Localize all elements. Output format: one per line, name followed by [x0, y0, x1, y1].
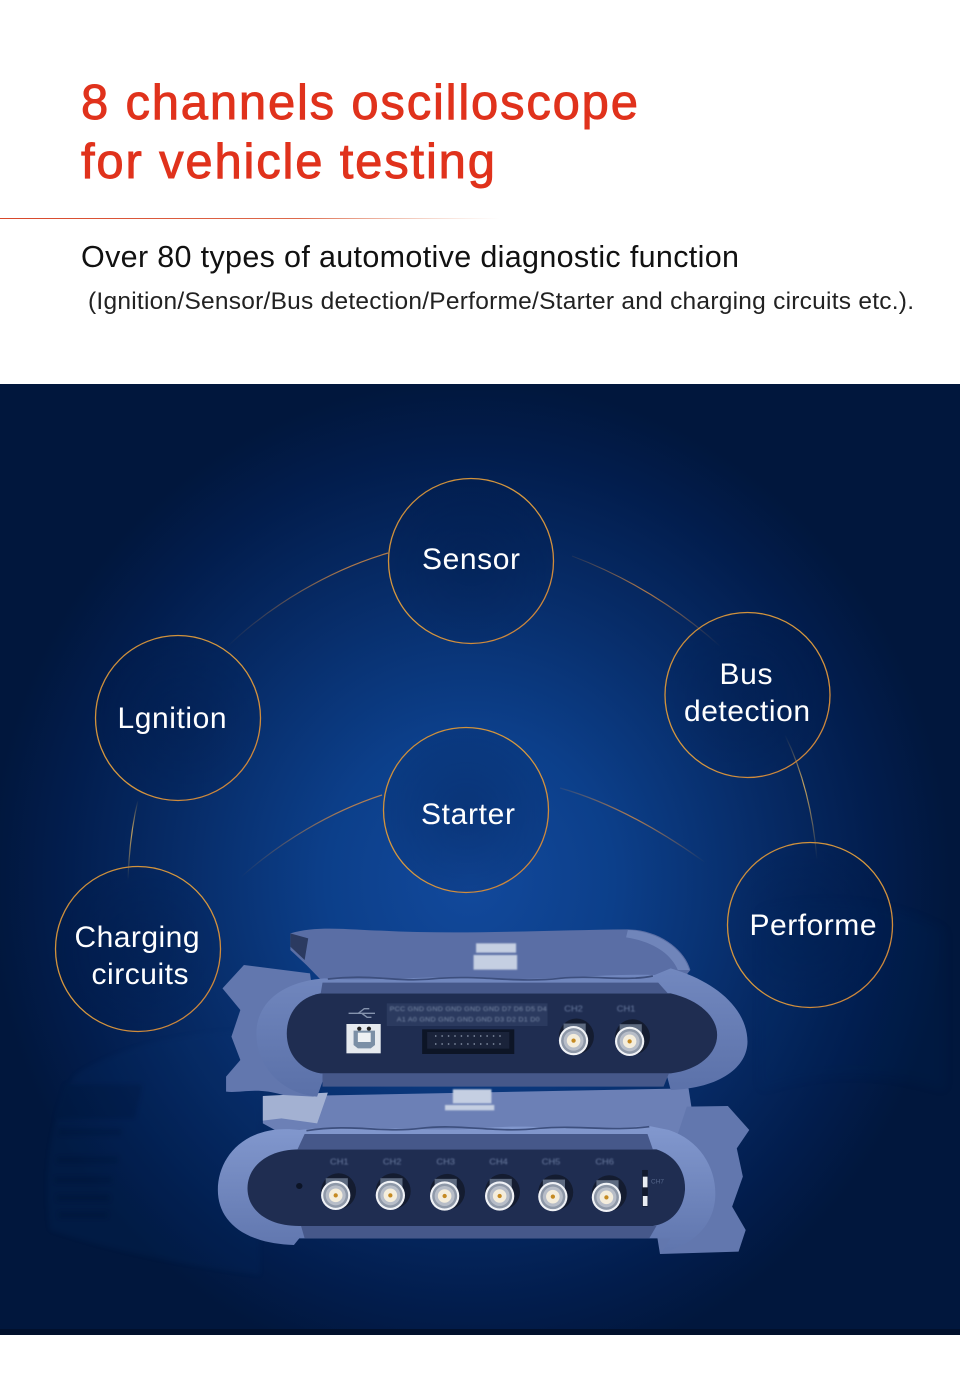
title: for vehicle testing: [81, 135, 495, 189]
upper bumper wave seam: [328, 976, 653, 980]
lower channel labels: CH3: [436, 1157, 455, 1166]
upper panel: [287, 993, 717, 1073]
node: Bus detection: detection: [684, 695, 810, 728]
lower channel labels: CH6: [595, 1157, 614, 1166]
node: Charging circuits: circuits: [92, 958, 188, 991]
arc: ignition to sensor: [226, 553, 388, 648]
probe compensation terminals: [642, 1170, 664, 1207]
lower channel labels: [330, 1157, 614, 1166]
probe compensation terminals: CH7: [651, 1179, 664, 1185]
lower channel labels: CH5: [542, 1157, 560, 1166]
upper BNC connectors: [559, 1019, 650, 1056]
power indicator: [296, 1183, 302, 1189]
arc: bus detection to performe: [785, 735, 817, 860]
lower channel labels: CH1: [330, 1157, 349, 1166]
arc: starter left: [240, 795, 382, 878]
upper case logo: [474, 943, 517, 970]
device: upper 2-channel oscilloscope: [222, 929, 747, 1097]
node: Starter: Starter: [421, 798, 515, 831]
node: Performe: Performe: [750, 909, 876, 942]
title: 8 channels oscilloscope: [81, 76, 638, 130]
upper case top: [290, 929, 690, 990]
bottom dark edge: [0, 1329, 960, 1335]
node: Charging circuits: Charging: [74, 921, 200, 954]
subtitle: Over 80 types of automotive diagnostic function: [81, 240, 739, 274]
lower case logo: [445, 1089, 494, 1110]
divider rule: [0, 218, 500, 219]
lower channel labels: CH2: [383, 1157, 401, 1166]
lower front bumper: [218, 1126, 715, 1253]
lower panel: [247, 1149, 685, 1226]
arc: starter right: [560, 788, 706, 863]
node: Sensor: Sensor: [422, 543, 520, 576]
node: Bus detection: Bus: [720, 658, 772, 691]
lower BNC connectors: [321, 1173, 627, 1212]
node: Starter: [384, 728, 548, 892]
node: Bus detection: [665, 612, 830, 778]
node: Lgnition: [96, 636, 260, 800]
digital pin label plate: [387, 1003, 547, 1026]
upper channel labels: CH1: [617, 1004, 635, 1014]
supporting text: (Ignition/Sensor/Bus detection/Performe/Starter and charging circuits etc.).: [88, 288, 914, 315]
node: Performe: [728, 842, 892, 1008]
connecting arcs: [128, 553, 817, 880]
lower channel labels: CH4: [489, 1157, 508, 1166]
node: Lgnition: Lgnition: [118, 702, 226, 735]
USB symbol: [349, 1009, 375, 1017]
node: Sensor: [388, 478, 554, 644]
device: lower 8-channel oscilloscope: [218, 1088, 749, 1254]
upper left wing: [222, 965, 324, 1097]
upper channel labels: CH2: [564, 1004, 583, 1014]
upper channel labels: [564, 1004, 635, 1014]
digital pin label plate: PCC GND GND GND GND GND D7 D6 D5 D4: [390, 1006, 547, 1013]
arc: ignition to charging circuits: [128, 800, 138, 880]
USB port: [346, 1024, 381, 1053]
lower bumper wave seam: [306, 1127, 649, 1131]
digital header connector: [422, 1029, 514, 1054]
faint car background: [47, 902, 945, 1275]
arc: sensor to bus detection: [572, 556, 721, 647]
panel: blue background: [0, 384, 960, 1335]
upper front bumper: [256, 968, 747, 1097]
lower case top: [263, 1088, 694, 1143]
digital pin label plate: A1 A0 GND GND GND GND D3 D2 D1 D0: [397, 1017, 540, 1024]
node: Charging circuits: [56, 866, 220, 1032]
lower right wing: [653, 1106, 749, 1254]
